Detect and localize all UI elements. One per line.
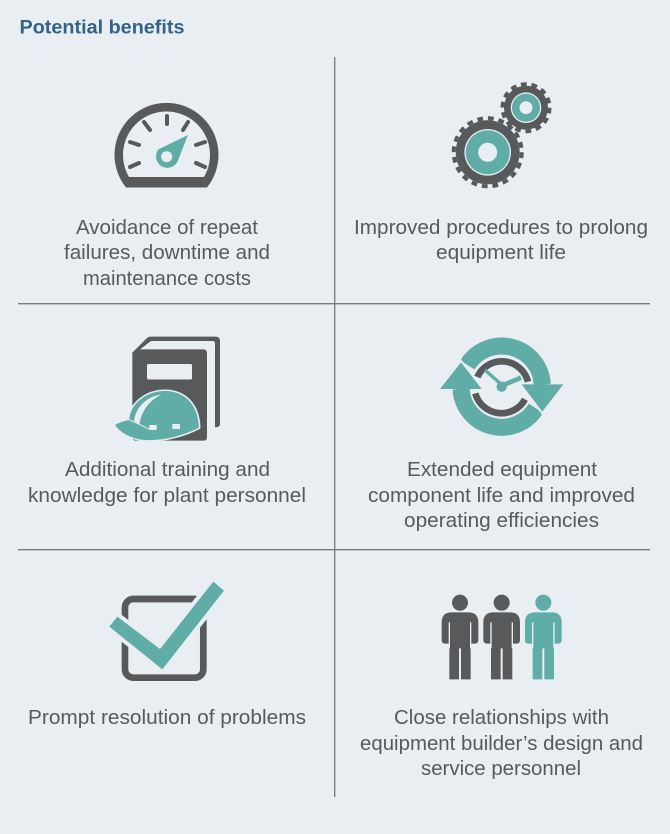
text: procedures caption: equipment life (436, 241, 566, 264)
title: Potential benefits (20, 16, 185, 38)
text: avoidance caption: maintenance costs (83, 267, 251, 290)
panel: prompt resolution (28, 582, 306, 729)
text: relationships caption: Close relationships with (394, 706, 609, 729)
text: training caption: knowledge for plant personnel (28, 484, 306, 507)
text: avoidance caption (64, 216, 270, 290)
panel: extended equipment life (368, 346, 635, 532)
person 1 (442, 595, 478, 679)
text: extended life caption: component life and improved (368, 484, 635, 507)
panel: close relationships (360, 595, 643, 780)
text: relationships caption (360, 706, 643, 780)
text: avoidance caption: failures, downtime and (64, 241, 270, 264)
icon: three people (442, 595, 562, 679)
text: training caption (28, 458, 306, 507)
icon: gears (454, 84, 550, 186)
text: procedures caption (354, 216, 648, 264)
panel: improved procedures (354, 84, 648, 264)
icon: book and hard hat (115, 337, 220, 441)
text: extended life caption (368, 458, 635, 532)
text: relationships caption: equipment builder’s design and (360, 732, 643, 755)
text: prompt resolution caption: Prompt resolution of problems (28, 706, 306, 729)
icon: speedometer gauge (115, 103, 219, 188)
icon: clock with cycle arrows (440, 346, 563, 427)
panel: avoidance of repeat failures (64, 103, 270, 290)
text: extended life caption: operating efficiencies (404, 509, 599, 532)
text: relationships caption: service personnel (421, 757, 581, 780)
text: extended life caption: Extended equipment (407, 458, 597, 481)
icon: check mark in box (109, 582, 224, 678)
text: training caption: Additional training and (65, 458, 270, 481)
panel: additional training (28, 337, 306, 507)
text: avoidance caption: Avoidance of repeat (76, 216, 258, 239)
person 3 (525, 595, 562, 679)
text: procedures caption: Improved procedures to prolong (354, 216, 648, 239)
person 2 (483, 595, 520, 679)
